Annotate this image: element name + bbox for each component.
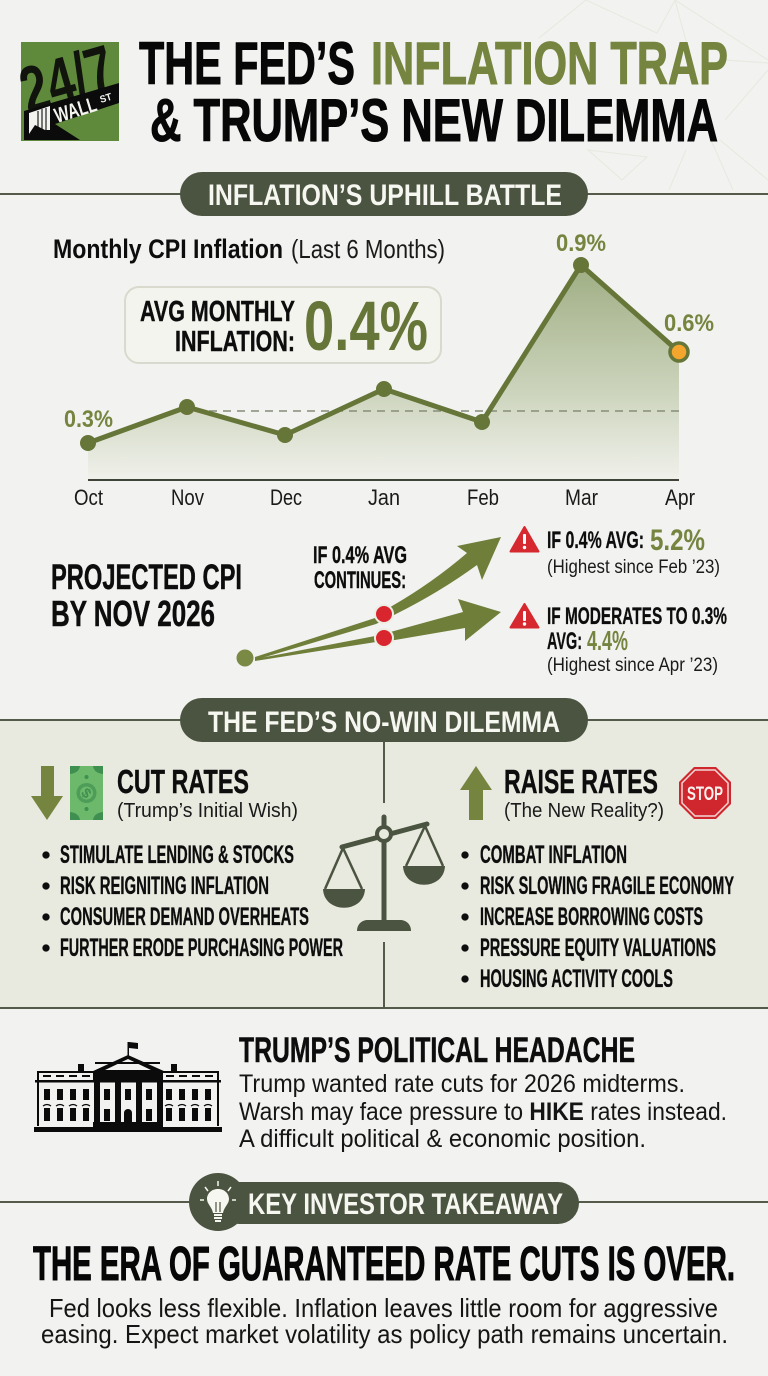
projection: 4.4%: 4.4%	[587, 625, 628, 656]
projection: 4.4%: AVG:	[547, 628, 582, 655]
cut rates list: STIMULATE LENDING & STOCKS	[60, 841, 294, 869]
takeaway text: Fed looks less flexible. Inflation leaves little room for aggressive	[49, 1293, 718, 1323]
callout: average monthly inflation: INFLATION:	[175, 326, 295, 358]
cut rates heading: CUT RATES	[117, 763, 249, 800]
political headache text: Warsh may face pressure to HIKE rates instead.	[239, 1098, 727, 1126]
section heading: inflation's uphill battle: INFLATION’S UPHILL BATTLE	[208, 179, 562, 212]
projection: 5.2%: (Highest since Feb ’23)	[547, 557, 720, 578]
callout: average monthly inflation: AVG MONTHLY	[140, 296, 295, 328]
icon: money	[70, 766, 103, 820]
icon: money: $	[78, 785, 95, 802]
section heading: no-win dilemma: THE FED’S NO-WIN DILEMMA	[208, 706, 560, 739]
icon: up arrow	[460, 766, 492, 820]
projection: 5.2%: 5.2%	[650, 524, 705, 557]
logo: 24/7 Wall St: ST	[99, 92, 113, 106]
icon: warning 2	[510, 604, 538, 628]
section heading: no-win dilemma	[180, 698, 588, 742]
cut rates list: FURTHER ERODE PURCHASING POWER	[60, 934, 343, 962]
line chart: monthly CPI	[64, 230, 714, 510]
icon: stop sign	[679, 767, 731, 819]
logo: 24/7 Wall St	[11, 30, 122, 141]
projection arrows	[236, 537, 501, 666]
line chart: monthly CPI: Feb	[467, 485, 499, 510]
logo: 24/7 Wall St: WALL	[52, 93, 100, 128]
scenario label: CONTINUES:	[314, 567, 406, 594]
section heading: key investor takeaway: KEY INVESTOR TAKEAWAY	[248, 1188, 563, 1221]
projection: 4.4%: (Highest since Apr ’23)	[547, 655, 718, 676]
line chart: monthly CPI: 0.9%	[556, 230, 606, 257]
cut rates list: RISK REIGNITING INFLATION	[60, 872, 269, 900]
line chart: monthly CPI: Oct	[74, 485, 103, 510]
line chart: monthly CPI: 0.3%	[64, 406, 113, 433]
section heading: inflation's uphill battle	[180, 172, 588, 216]
logo: 24/7 Wall St: 24/7	[11, 30, 122, 127]
line chart: monthly CPI: Dec	[270, 485, 302, 510]
political headache text: Trump wanted rate cuts for 2026 midterms.	[239, 1070, 685, 1098]
projection: 5.2%: IF 0.4% AVG:	[547, 527, 644, 554]
projected CPI heading	[51, 558, 242, 634]
scenario label	[313, 542, 407, 594]
cut rates heading: (Trump’s Initial Wish)	[117, 800, 298, 822]
title: THE FED’S	[139, 30, 355, 97]
callout: average monthly inflation	[125, 287, 441, 365]
raise rates list	[462, 841, 734, 993]
raise rates heading: RAISE RATES	[504, 763, 658, 800]
scenario label: IF 0.4% AVG	[313, 542, 407, 569]
line chart: monthly CPI: Apr	[665, 485, 695, 510]
icon: down arrow	[31, 766, 63, 820]
raise rates heading: (The New Reality?)	[504, 800, 664, 822]
callout: average monthly inflation: 0.4%	[304, 287, 428, 365]
raise rates heading	[504, 763, 664, 822]
icon: stop sign: STOP	[687, 784, 723, 805]
raise rates list: COMBAT INFLATION	[480, 841, 627, 869]
icon: lightbulb	[200, 1181, 236, 1222]
chart heading: Monthly CPI Inflation	[53, 234, 283, 264]
takeaway text	[41, 1293, 728, 1349]
title	[139, 30, 728, 154]
chart heading	[53, 234, 445, 264]
icon: warning 1	[510, 527, 538, 552]
political headache text	[239, 1031, 727, 1153]
political headache text: A difficult political & economic position.	[239, 1125, 646, 1153]
projection: 4.4%	[547, 603, 727, 676]
line chart: monthly CPI: Jan	[368, 485, 400, 510]
projected CPI heading: PROJECTED CPI	[51, 558, 242, 597]
projection: 5.2%	[547, 524, 720, 578]
cut rates list: CONSUMER DEMAND OVERHEATS	[60, 903, 309, 931]
cut rates heading	[117, 763, 298, 822]
line chart: monthly CPI: Mar	[565, 485, 598, 510]
icon: balance scale	[323, 817, 445, 931]
chart heading: (Last 6 Months)	[291, 234, 445, 264]
cut rates list	[42, 841, 343, 962]
panel: no-win dilemma	[0, 720, 768, 1008]
section heading: key investor takeaway	[189, 1173, 579, 1231]
line chart: monthly CPI: 0.6%	[664, 310, 714, 337]
line chart: monthly CPI: Nov	[171, 485, 204, 510]
takeaway text: easing. Expect market volatility as policy path remains uncertain.	[41, 1319, 728, 1349]
icon: white house	[34, 1042, 222, 1132]
projected CPI heading: BY NOV 2026	[51, 593, 215, 634]
